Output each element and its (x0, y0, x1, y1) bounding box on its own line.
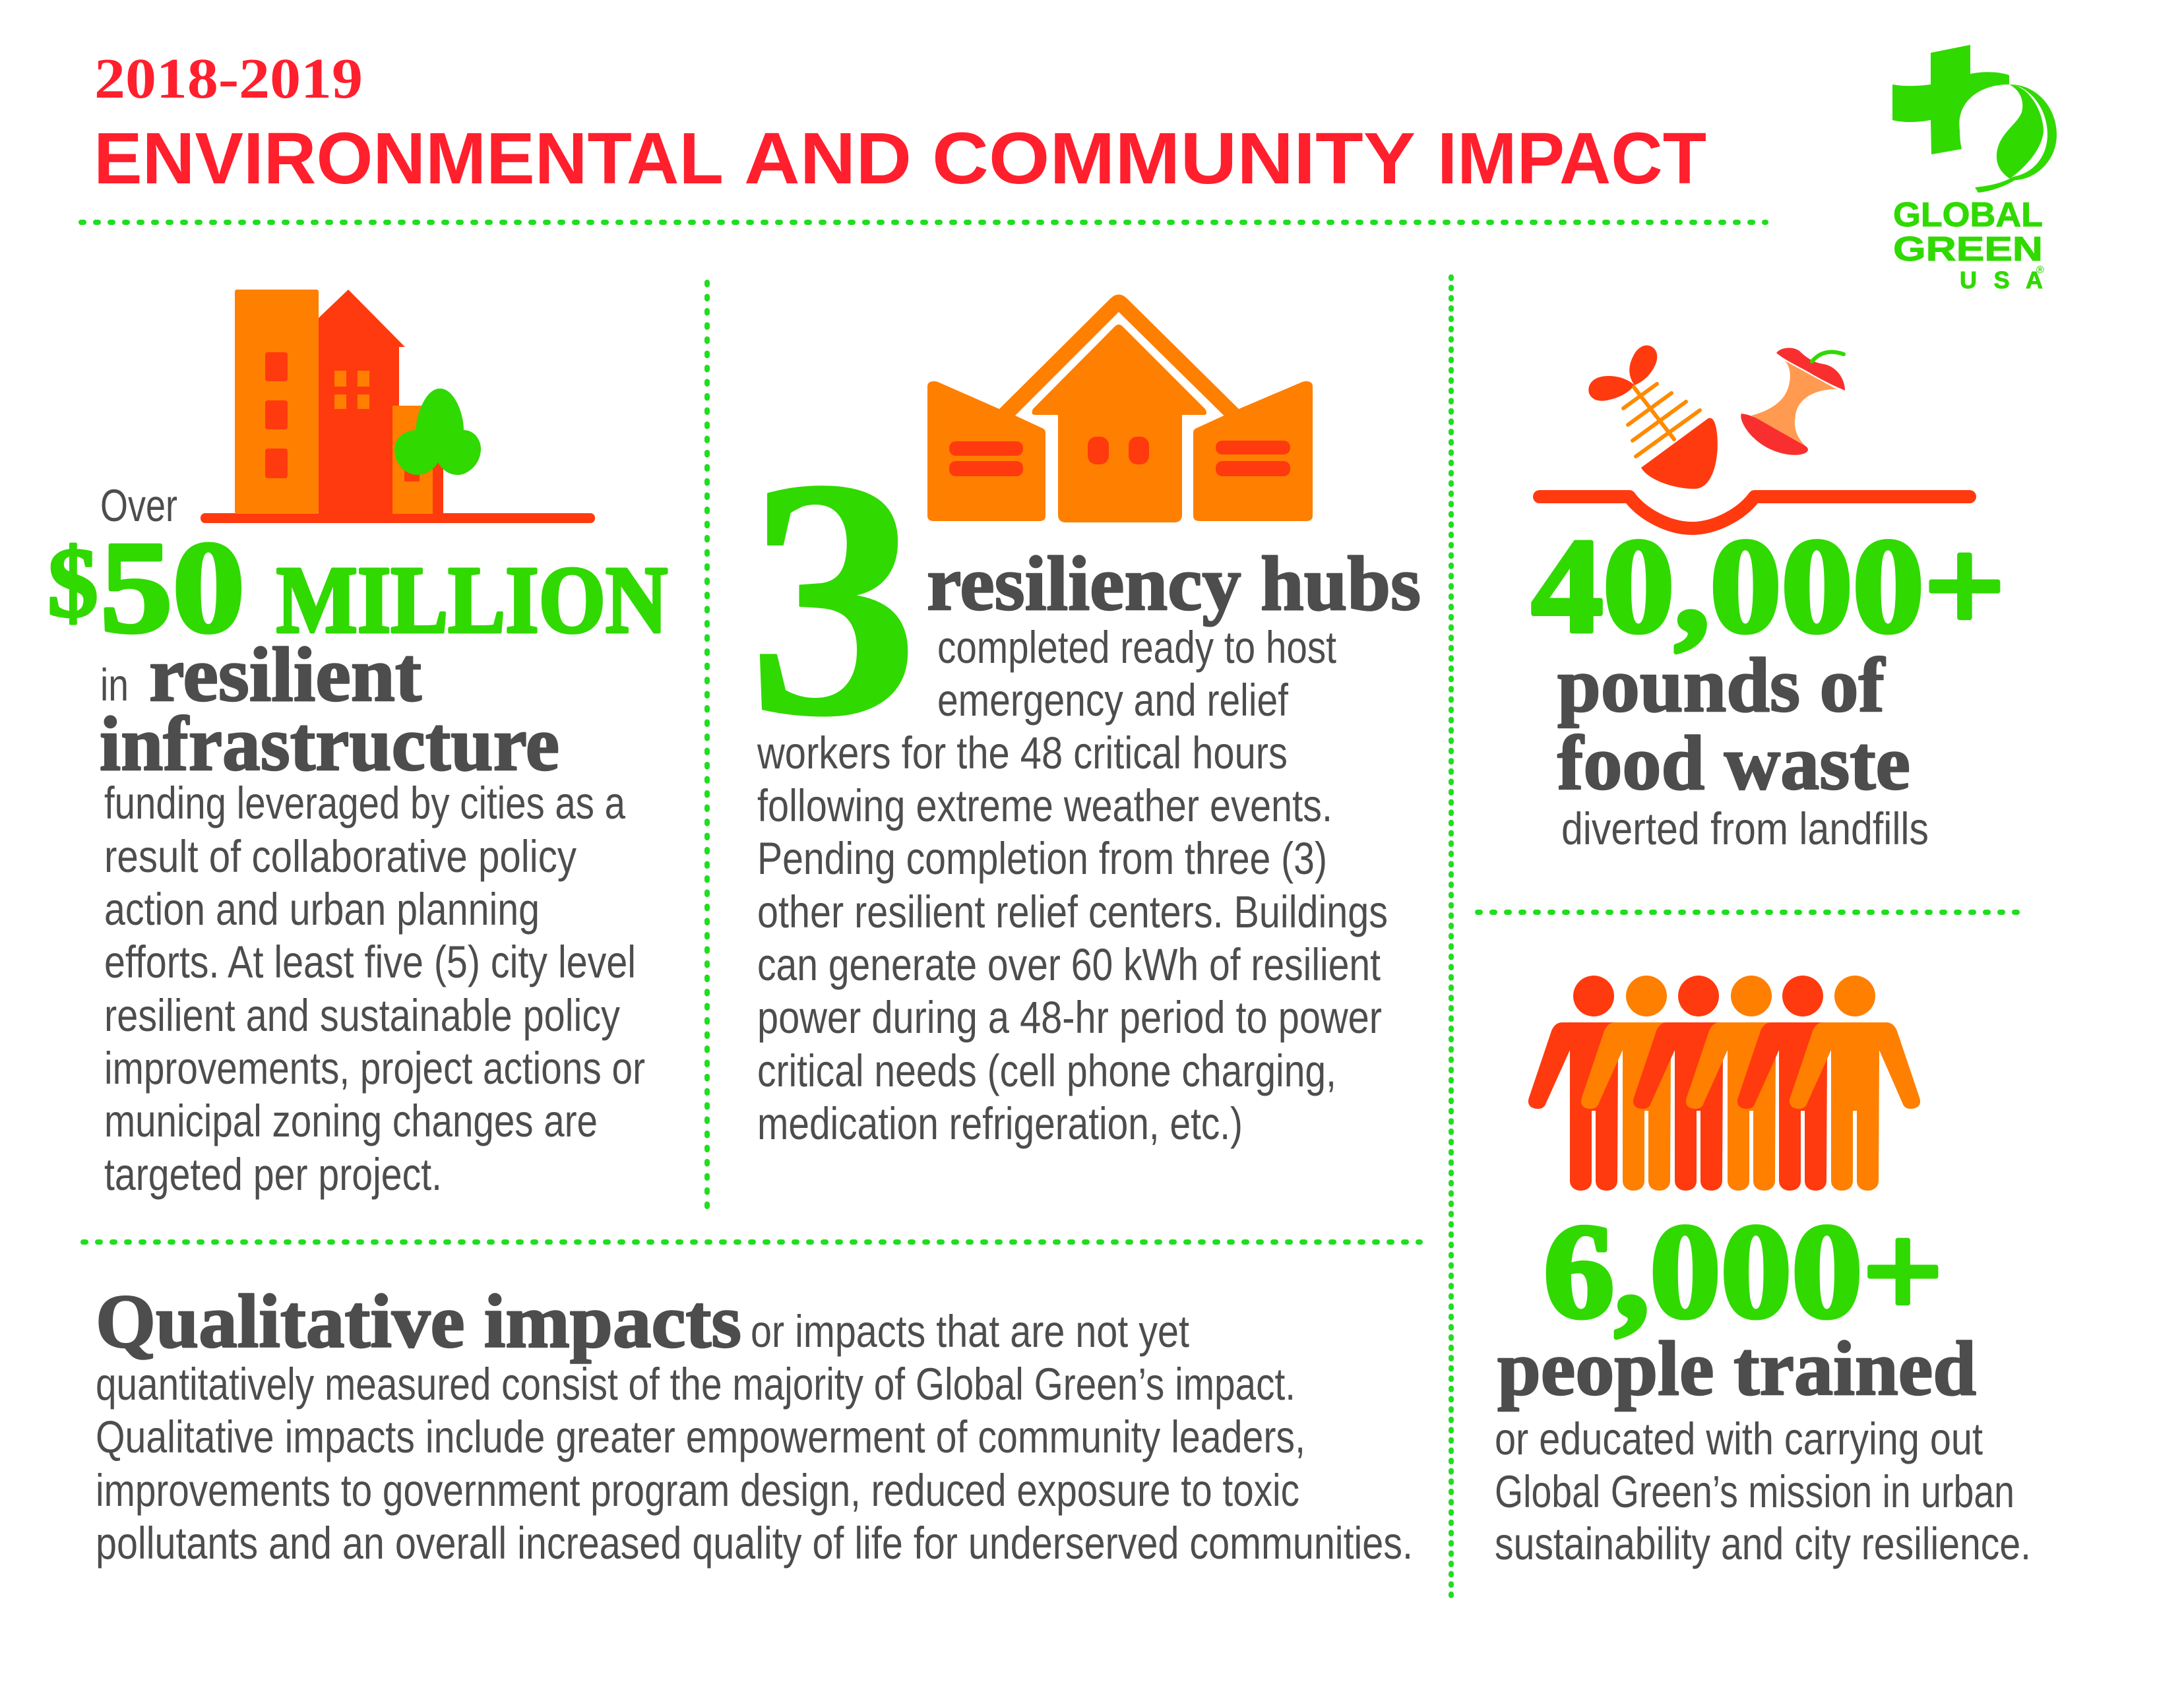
text: qualitative description: Qualitative impacts include greater empowerment of community leaders, (96, 1412, 1305, 1462)
panel: people trained (1495, 976, 2031, 1569)
logo wordmark: U S A (1960, 266, 2043, 294)
icon: food scraps in ground (1540, 346, 1970, 528)
logo wordmark: GLOBAL (1893, 196, 2043, 234)
title (94, 46, 1706, 199)
icon: city buildings and tree (201, 290, 595, 523)
text: qualitative description: improvements to government program design, reduced exposure to toxic (96, 1465, 1299, 1516)
title: heading: AND (744, 118, 912, 199)
text: hubs description: power during a 48-hr period to power (757, 992, 1382, 1043)
text: diverted from landfills: diverted from landfills (1561, 803, 1929, 854)
stat: $50 million (47, 515, 668, 660)
text: funding description: municipal zoning changes are (104, 1096, 598, 1146)
text: funding description (104, 778, 645, 1200)
logo: Global Green USA (1892, 45, 2057, 294)
heading: people trained: people trained (1497, 1325, 1976, 1412)
heading: in resilient infrastructure (100, 631, 559, 787)
text: people description: or educated with carrying out (1495, 1414, 1983, 1464)
text: hubs description: completed ready to host (937, 622, 1336, 673)
text: funding description: targeted per project. (104, 1149, 442, 1200)
text: funding description: resilient and sustainable policy (104, 990, 620, 1041)
heading: in resilient infrastructure: in (100, 660, 129, 710)
panel: resilient infrastructure (47, 290, 668, 1200)
stat: 3: 3 (748, 408, 918, 786)
text: funding description: efforts. At least five (5) city level (104, 937, 636, 987)
text: people description: Global Green’s mission in urban (1495, 1466, 2014, 1517)
text: qualitative description: or impacts that are not yet (751, 1306, 1189, 1357)
text: qualitative description: quantitatively measured consist of the majority of Global Green’s impact. (96, 1359, 1295, 1410)
panel: food waste (1532, 346, 2005, 854)
text: hubs description: Pending completion from three (3) (757, 833, 1327, 884)
text: hubs description: other resilient relief centers. Buildings (757, 887, 1388, 937)
stat: $50 million: 50 (100, 515, 245, 660)
title: heading: IMPACT (1437, 118, 1706, 199)
text: hubs description: medication refrigeration, etc.) (757, 1098, 1243, 1149)
heading: pounds of food waste: pounds of (1557, 642, 1886, 728)
heading: pounds of food waste: food waste (1557, 720, 1910, 806)
title: heading: COMMUNITY (932, 118, 1416, 199)
text: hubs description: workers for the 48 critical hours (757, 728, 1288, 778)
icon: cross and leaf (1892, 45, 2057, 193)
stat: 40,000+: 40,000+ (1532, 511, 2005, 661)
stat: 6,000+: 6,000+ (1544, 1197, 1943, 1346)
heading: pounds of food waste (1557, 642, 1910, 806)
text: hubs description (757, 622, 1388, 1149)
logo wordmark: ® (2036, 265, 2044, 276)
text: over: Over (100, 480, 177, 531)
text: people description: sustainability and city resilience. (1495, 1518, 2031, 1569)
text: hubs description: can generate over 60 kWh of resilient (757, 939, 1381, 990)
text: qualitative description: pollutants and an overall increased quality of life for underserved communities. (96, 1518, 1413, 1569)
heading: qualitative impacts: Qualitative impacts (96, 1280, 741, 1363)
text: qualitative description (96, 1306, 1413, 1569)
title: heading (94, 118, 1706, 199)
title: heading: ENVIRONMENTAL (94, 118, 724, 199)
logo wordmark: GREEN (1893, 230, 2043, 268)
stat: $50 million: MILLION (276, 547, 668, 653)
text: funding description: improvements, project actions or (104, 1043, 645, 1094)
logo wordmark (1893, 196, 2044, 294)
text: funding description: result of collaborative policy (104, 831, 577, 882)
heading: in resilient infrastructure: infrastructure (100, 701, 559, 787)
heading: resiliency hubs: resiliency hubs (927, 540, 1421, 627)
icon: row of people (1528, 976, 1920, 1191)
title: years: 2018-2019 (94, 46, 363, 110)
text: funding description: funding leveraged by cities as a (104, 778, 626, 828)
text: people description (1495, 1414, 2031, 1569)
heading: in resilient infrastructure: resilient (149, 631, 421, 718)
text: hubs description: critical needs (cell phone charging, (757, 1045, 1336, 1096)
stat: $50 million: $ (47, 527, 98, 638)
icon: three houses (927, 294, 1313, 522)
panel: qualitative impacts (96, 1280, 1413, 1569)
text: hubs description: following extreme weather events. (757, 780, 1332, 831)
text: hubs description: emergency and relief (937, 675, 1289, 726)
panel: resiliency hubs (748, 294, 1421, 1149)
text: funding description: action and urban planning (104, 884, 540, 935)
